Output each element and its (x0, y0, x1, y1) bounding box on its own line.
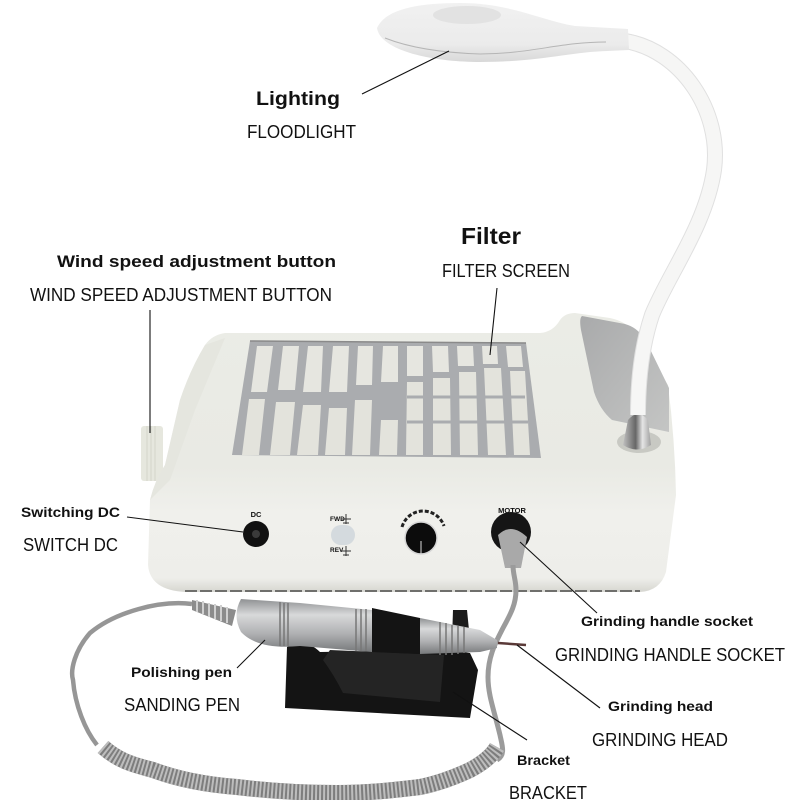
lamp opening (433, 6, 501, 24)
label: grinding handle socket (555, 613, 785, 665)
label: polishing pen (124, 664, 240, 715)
label: bracket: Bracket (517, 752, 570, 768)
label: polishing pen: SANDING PEN (124, 695, 240, 715)
casing (148, 313, 676, 592)
pen black grip (372, 608, 420, 654)
motor socket: MOTOR (498, 506, 526, 515)
DC port: DC (251, 510, 262, 519)
label: bracket (509, 752, 587, 800)
coiled cord (72, 603, 497, 793)
label: polishing pen: Polishing pen (131, 664, 232, 680)
grinding bit (498, 643, 526, 645)
speed dial (402, 511, 444, 554)
label: switch DC (21, 504, 120, 555)
label: grinding head: GRINDING HEAD (592, 730, 728, 750)
direction switch: REV (330, 547, 344, 554)
label: grinding handle socket: Grinding handle socket (581, 613, 753, 629)
label: switch DC: SWITCH DC (23, 535, 118, 555)
device body (141, 313, 676, 592)
wind speed knob (141, 426, 163, 481)
direction switch: FWD (330, 516, 345, 523)
silver collar (617, 414, 661, 453)
label: grinding head (592, 698, 728, 750)
gooseneck and lamp (377, 3, 715, 453)
motor socket (491, 506, 531, 568)
pen rear barrel (236, 599, 372, 652)
filter screen (232, 341, 541, 458)
label: lighting: Lighting (256, 89, 340, 110)
label: filter: FILTER SCREEN (442, 261, 570, 281)
lamp head (377, 3, 629, 62)
polishing pen (192, 599, 497, 655)
label: filter (442, 223, 570, 281)
vent strip (185, 590, 640, 592)
callout lines (127, 51, 600, 740)
cable to motor (488, 565, 516, 760)
direction switch (330, 514, 355, 556)
gooseneck arm (625, 41, 715, 415)
label: switch DC: Switching DC (21, 504, 120, 520)
pen front taper (420, 618, 497, 654)
label: lighting (247, 89, 356, 142)
label: wind speed: Wind speed adjustment button (57, 252, 336, 271)
label: filter: Filter (461, 223, 521, 249)
cord grip (192, 600, 236, 626)
DC port (243, 510, 269, 547)
label: grinding handle socket: GRINDING HANDLE SOCKET (555, 645, 785, 665)
left side shading (150, 338, 225, 500)
label: grinding head: Grinding head (608, 698, 713, 714)
label: lighting: FLOODLIGHT (247, 122, 356, 142)
label: wind speed (30, 252, 336, 305)
handpiece stand (285, 610, 478, 718)
label: wind speed: WIND SPEED ADJUSTMENT BUTTON (30, 285, 332, 305)
grey side panel (580, 316, 669, 432)
